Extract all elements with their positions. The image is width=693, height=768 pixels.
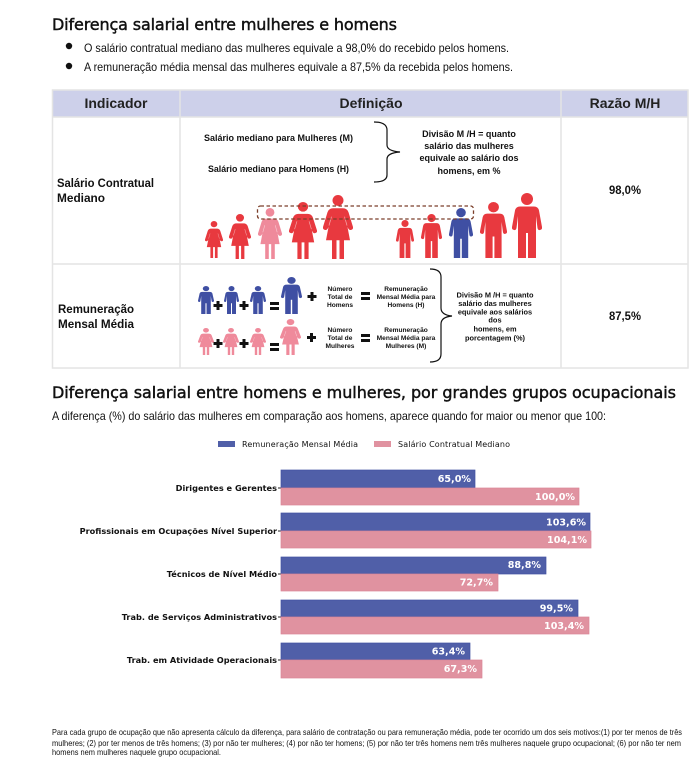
- group: Dirigentes e Gerentes: 100,0%: [535, 492, 575, 503]
- text: total men and men's pay: Homens: [327, 302, 353, 309]
- division explanation: equivale ao salário dos: [419, 153, 519, 163]
- text: total men and men's pay: [327, 286, 436, 309]
- labels for median salary: [204, 133, 353, 174]
- division explanation: porcentagem (%): [465, 334, 526, 342]
- text: total men and men's pay: Remuneração: [384, 286, 428, 293]
- text: total men and men's pay: Número: [328, 286, 352, 293]
- text: total women and women's pay: Remuneração: [384, 327, 428, 334]
- group: Administrativos: 103,4%: [544, 621, 584, 632]
- text: total women and women's pay: Mulheres: [326, 343, 355, 350]
- group: Profissionais: [80, 513, 591, 548]
- text: total women and women's pay: [326, 327, 436, 350]
- icons: women sum: [198, 319, 301, 355]
- table header row: [52, 90, 688, 117]
- group: Dirigentes e Gerentes: [176, 470, 579, 505]
- text: total men and men's pay: Mensal Média para: [377, 294, 436, 301]
- subtitle: A diferença (%) do salário das mulheres em comparação aos homens, aparece quando for maior ou menor que 100:: [52, 409, 606, 423]
- table header row: Indicador: [84, 95, 148, 111]
- title: pay gap by occupation: Diferença salarial entre homens e mulheres, por grandes grupos ocupacionais: [52, 383, 676, 402]
- labels for median salary: Salário mediano para Homens (H): [208, 164, 349, 174]
- group: Técnicos: [167, 557, 546, 591]
- group: Profissionais: 104,1%: [547, 535, 587, 546]
- division explanation: salário das mulheres: [458, 299, 532, 308]
- text: total men and men's pay: Homens (H): [388, 302, 424, 309]
- group: Operacionais: [127, 643, 482, 678]
- division explanation: salário das mulheres: [424, 141, 514, 151]
- group: Administrativos: Trab. de Serviços Administrativos: [122, 612, 277, 622]
- bullet list: key findings: [66, 41, 513, 74]
- group: Dirigentes e Gerentes: Dirigentes e Gerentes: [176, 483, 277, 493]
- group: Administrativos: 99,5%: [540, 604, 573, 614]
- division explanation: homens, em: [473, 324, 517, 334]
- legend: Salário Contratual Mediano: [398, 440, 510, 449]
- definition: median salary: [204, 122, 542, 259]
- value: 98,0%: 98,0%: [609, 183, 641, 197]
- division explanation: Divisão M /H = quanto: [456, 290, 534, 300]
- bullet list: key findings: A remuneração média mensal das mulheres equivale a 87,5% da recebida pelos homens.: [84, 60, 513, 74]
- text: total women and women's pay: Mulheres (M): [386, 343, 426, 350]
- group: Técnicos: Técnicos de Nível Médio: [167, 569, 277, 579]
- text: total men and men's pay: Total de: [328, 294, 353, 301]
- value: 87,5%: 87,5%: [609, 309, 641, 323]
- icons: five men by salary order: [396, 193, 542, 258]
- dashed median highlight: [258, 206, 474, 219]
- bullet list: key findings: O salário contratual mediano das mulheres equivale a 98,0% do recebido pelos homens.: [84, 41, 509, 55]
- group: Técnicos: 88,8%: [508, 560, 541, 571]
- group: Técnicos: 72,7%: [460, 578, 493, 588]
- row label: Remuneração Mensal Média: Remuneração: [58, 302, 134, 316]
- footnote: homens nem mulheres naquele grupo ocupacional.: [52, 747, 221, 757]
- division explanation: homens, em %: [437, 166, 501, 176]
- text: total women and women's pay: Total de: [328, 335, 353, 342]
- table header row: Razão M/H: [590, 95, 660, 111]
- brace: [374, 122, 400, 182]
- row label: Salário Contratual Mediano: Salário Contratual: [57, 176, 154, 190]
- text: total women and women's pay: Mensal Média para: [377, 335, 436, 342]
- icons: men sum: [198, 277, 302, 314]
- group: Profissionais: Profissionais em Ocupações Nível Superior: [80, 526, 278, 536]
- division explanation: dos: [488, 316, 502, 324]
- title: gender pay gap: Diferença salarial entre mulheres e homens: [52, 15, 397, 34]
- labels for median salary: Salário mediano para Mulheres (M): [204, 133, 353, 143]
- table: indicators and definitions: [52, 90, 688, 368]
- text: total women and women's pay: Número: [328, 327, 352, 334]
- footnote: [52, 727, 682, 757]
- legend: Remuneração Mensal Média: [242, 439, 358, 449]
- row label second line: Mensal Média: [58, 317, 134, 331]
- group: Administrativos: [122, 600, 589, 634]
- bar chart: occupations: [80, 470, 591, 678]
- definition: average pay: [198, 269, 534, 362]
- brace: [430, 269, 452, 362]
- table header row: Definição: [339, 95, 403, 111]
- division explanation: equivale aos salários: [458, 308, 532, 316]
- group: Operacionais: 67,3%: [444, 664, 477, 675]
- icons: five women by salary order: [205, 195, 353, 259]
- math operators: [214, 292, 370, 351]
- group: Operacionais: Trab. em Atividade Operacionais: [127, 655, 277, 665]
- group: Operacionais: 63,4%: [432, 646, 465, 658]
- group: Dirigentes e Gerentes: 65,0%: [438, 474, 471, 485]
- group: Profissionais: 103,6%: [546, 518, 586, 528]
- division explanation: Divisão M /H = quanto: [422, 129, 516, 139]
- table grid lines: [52, 90, 688, 368]
- row label second line: Mediano: [57, 191, 105, 205]
- legend: [218, 439, 510, 449]
